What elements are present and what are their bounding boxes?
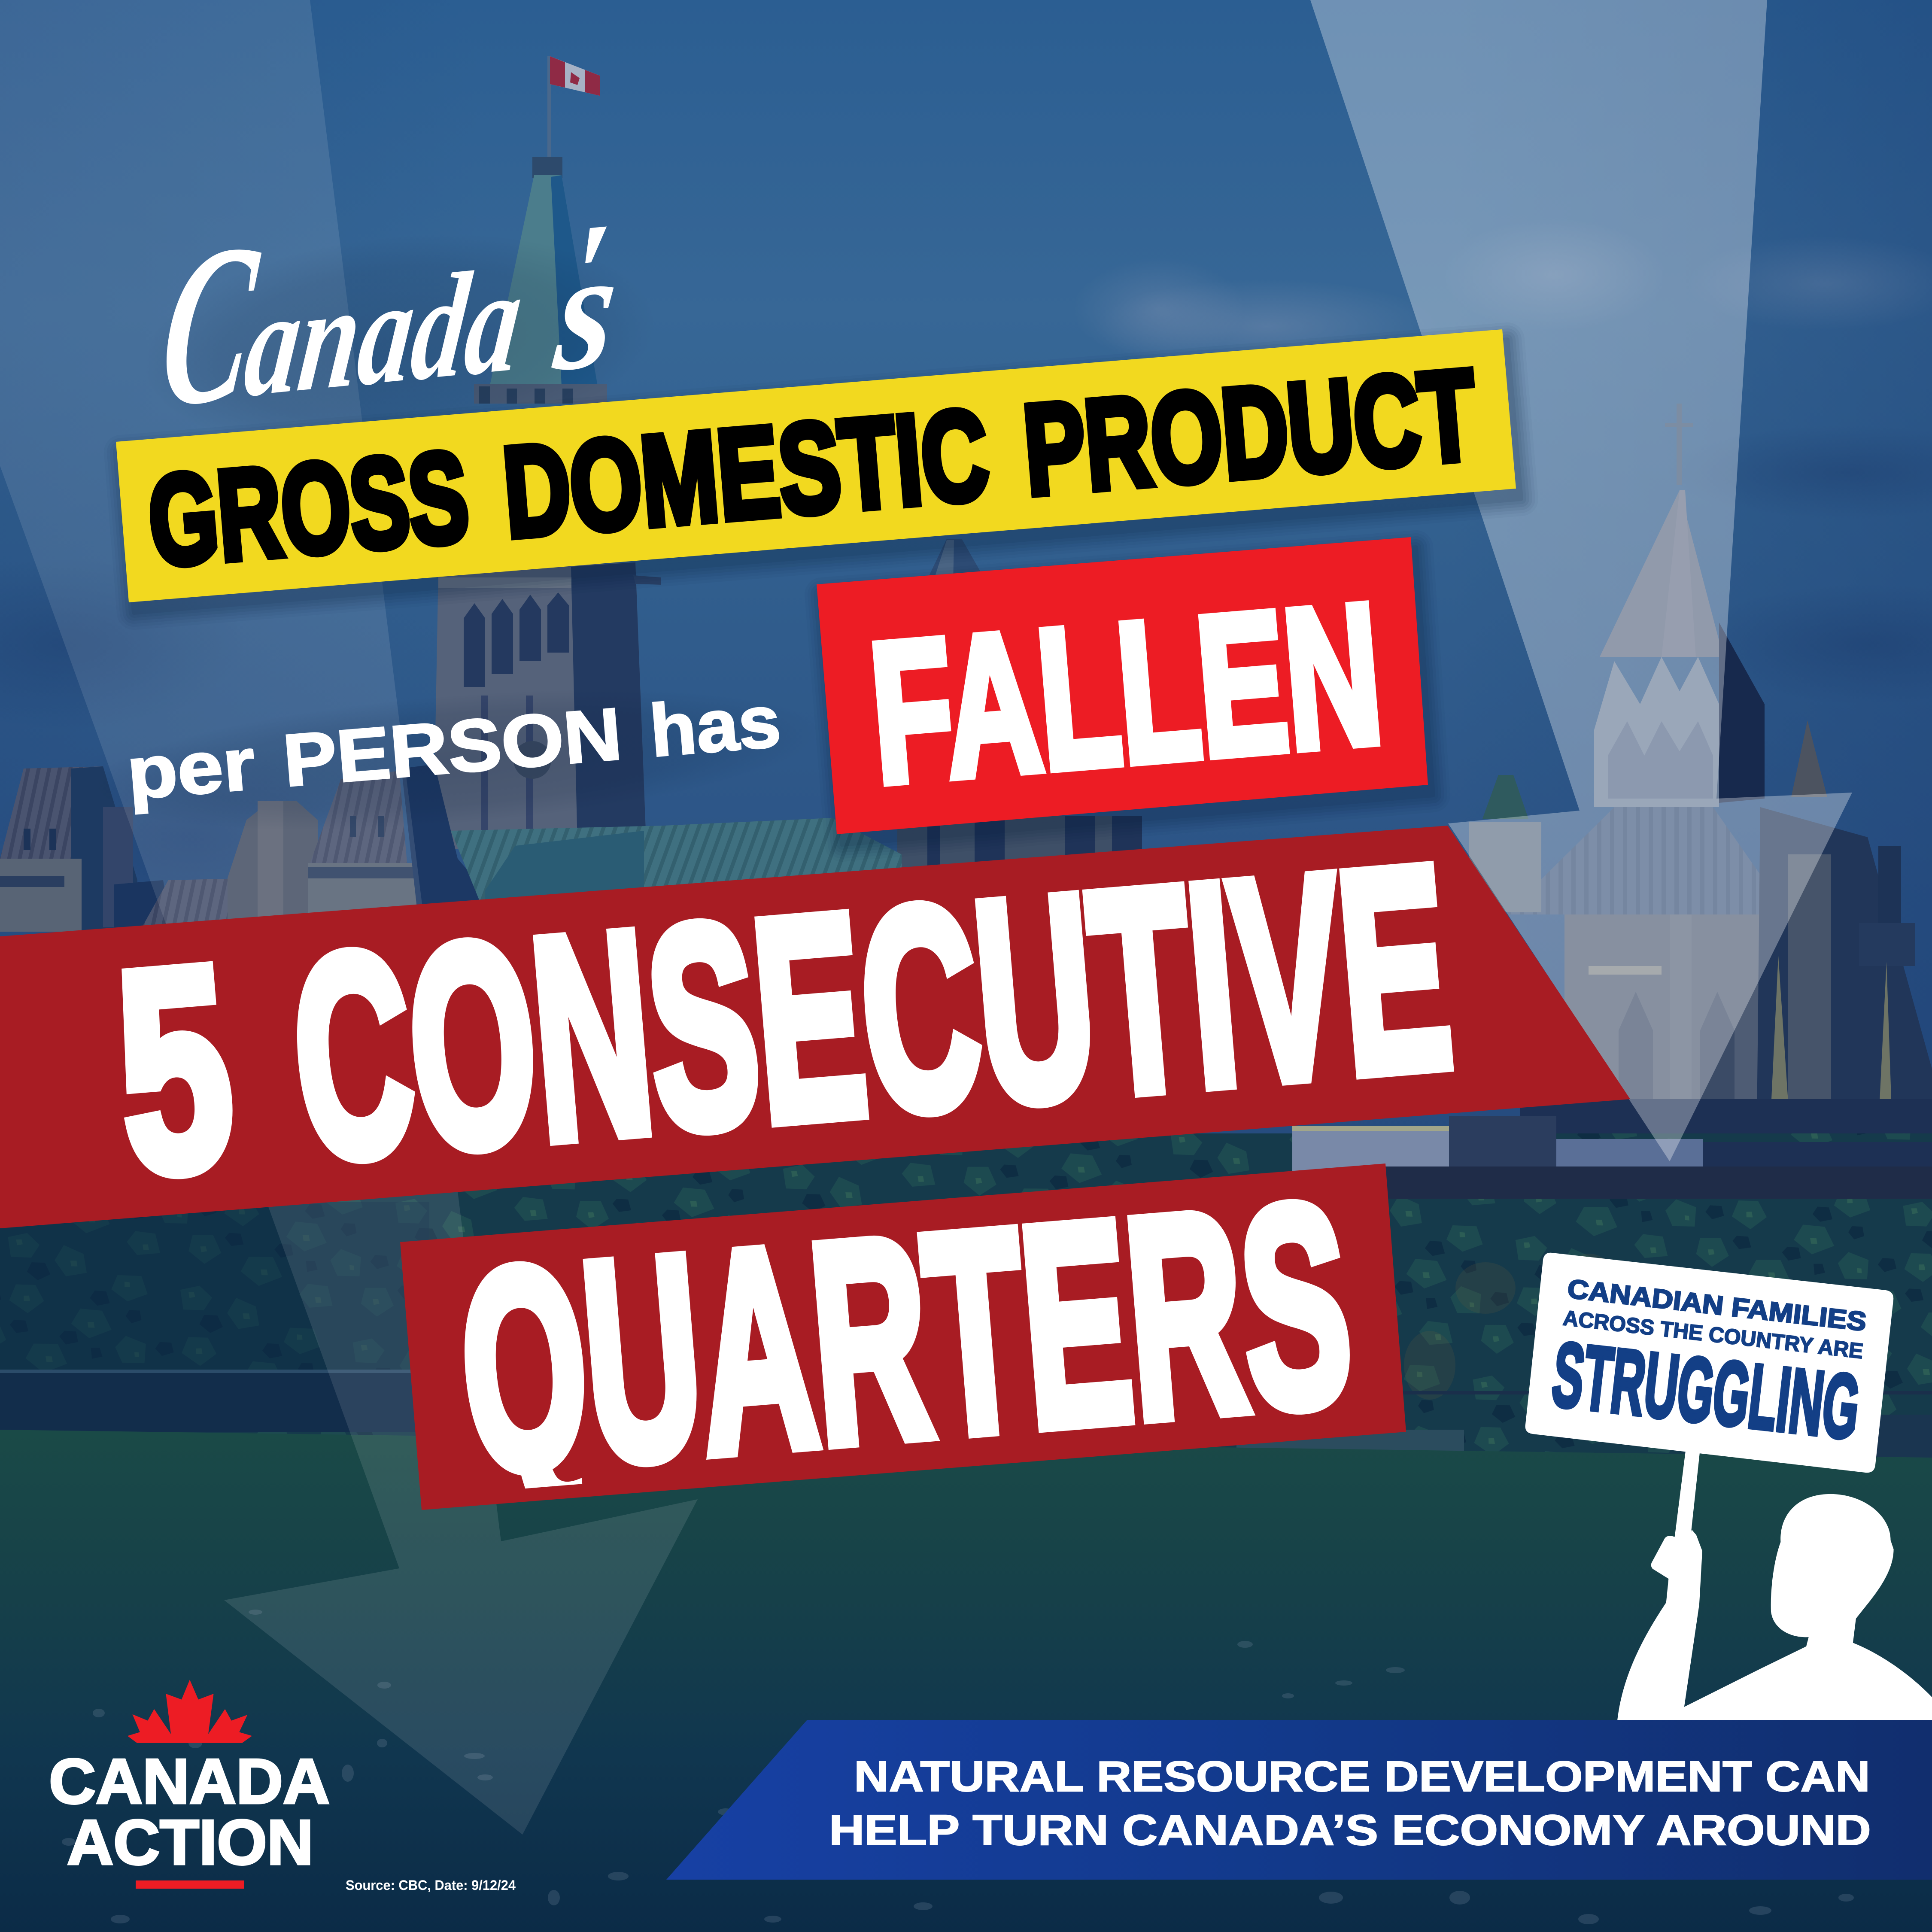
box shadow [822,547,1433,844]
script heading: Canada's: ' [554,192,614,359]
banner text [829,1753,1871,1854]
script heading: Canada's: anada [237,236,530,428]
dark red banner: 5 consecutive [0,805,1630,1234]
banner shadow [121,340,1521,613]
tree covered escarpment [0,1133,1932,1460]
script heading: Canada's: s [545,213,626,407]
5 CONSECUTIVE text [107,805,1461,1234]
placard text [1548,1274,1868,1458]
icon: person silhouette holding pole [1617,1449,1932,1720]
fence along the lawn [0,1370,1932,1458]
sky [0,0,1932,1245]
translucent down arrow: right [1310,0,1852,1161]
fallen leaves on the lawn [62,1610,1854,1924]
text: per PERSON has: PERSON [280,693,625,802]
text: per PERSON has: has [647,680,784,772]
Canada Action logo [49,1680,330,1889]
source note: Source: CBC, Date: 9/12/24 [346,1877,516,1893]
script heading: Canada's: C [151,195,270,455]
bottom call-to-action banner [666,1720,1932,1880]
translucent down arrow: left [0,0,698,1835]
placard text: CANADIAN FAMILIES [1566,1274,1868,1337]
banner text: HELP TURN CANADA’S ECONOMY AROUND [829,1806,1871,1854]
Peace Tower [433,157,661,850]
autumn tints in the trees [1404,1254,1610,1400]
hilltop service buildings and wall [1292,1116,1932,1199]
Library of Parliament [1469,404,1932,1202]
Canadian flag on the Peace Tower [547,56,600,159]
heading text: PRODUCT [1018,343,1481,522]
placard [1525,1253,1893,1473]
logo wordmark: ACTION [67,1807,313,1878]
dark red box: quarters [400,1163,1406,1510]
FALLEN text: FALLEN [863,562,1389,824]
text: per PERSON has: per [124,722,258,815]
heading text: DOMESTIC [498,383,993,564]
west block buildings [0,764,902,932]
icon: maple leaf [128,1680,252,1743]
heading text: GROSS [143,425,474,593]
protester with sign [1525,1253,1932,1720]
banner text: NATURAL RESOURCE DEVELOPMENT CAN [854,1753,1870,1801]
logo wordmark [49,1746,330,1878]
yellow banner: gross domestic product [116,329,1521,613]
heading text [143,343,1481,593]
script heading: Canada's [133,192,666,475]
5 CONSECUTIVE text: 5 [107,905,243,1234]
logo underline [136,1880,244,1889]
text: per PERSON has [80,665,826,854]
logo wordmark: CANADA [49,1746,330,1817]
lawn [0,1430,1932,1932]
bright red box: FALLEN [817,537,1433,844]
shaded trees on the left [0,1202,429,1382]
placard text: ACROSS THE COUNTRY ARE [1562,1306,1865,1363]
second spire and central tower [897,539,1142,910]
